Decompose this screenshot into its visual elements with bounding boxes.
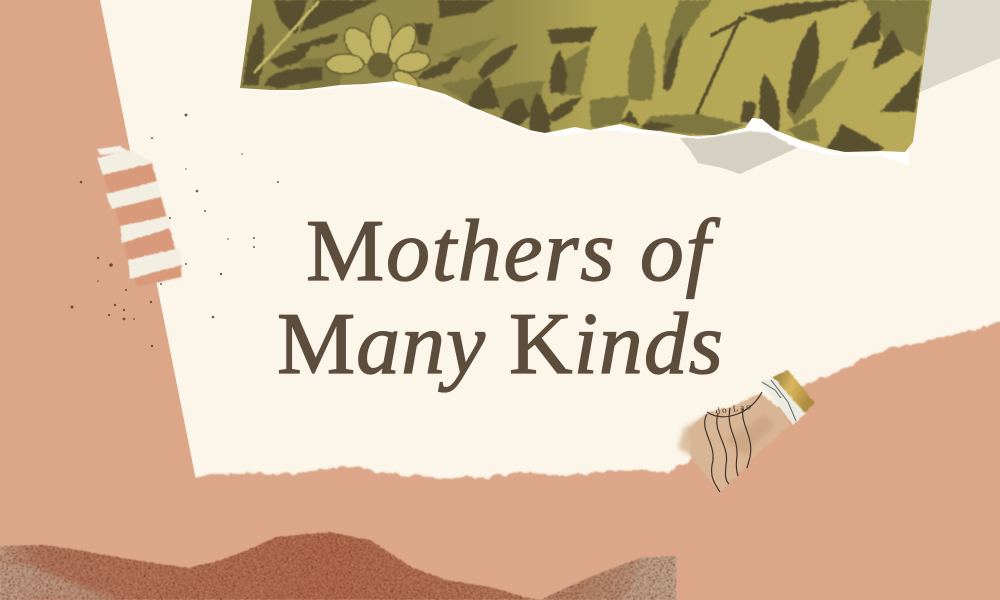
dark stem lines: [255, 2, 745, 113]
postmark lines: [705, 392, 762, 492]
copper dark grain: [0, 525, 680, 600]
foliage print panel: [235, 0, 935, 160]
title line 2: Many Kinds: [277, 296, 723, 393]
marble veins: [762, 380, 796, 421]
salmon paper: straight left wedge: [0, 0, 196, 600]
speckles on salmon paper: [70, 181, 153, 347]
flower: [326, 14, 431, 93]
copper grey lower left: [0, 565, 120, 600]
grey paper scrap under foliage: [680, 125, 797, 174]
stamp scrap: [678, 370, 815, 492]
dark leaves and stems: [243, 0, 923, 153]
gold strip: [773, 370, 815, 413]
stamp soft left lump: [678, 416, 712, 458]
white torn paper edge under foliage: [240, 82, 909, 165]
striped washi tape: [97, 146, 182, 287]
marble strip: [760, 377, 807, 425]
stamp tan body: [688, 393, 790, 492]
copper grey right end: [624, 558, 661, 600]
title: [277, 203, 723, 393]
grey paper behind foliage, top right: [918, 0, 1000, 93]
title line 1: Mothers of: [306, 203, 721, 300]
mid olive leaves: [300, 0, 930, 142]
stamp mottling: [725, 415, 775, 455]
copper torn foil: [0, 525, 680, 600]
postmark text: do Lao: [715, 401, 753, 416]
salmon paper: torn bottom area: [150, 320, 1000, 600]
copper light grain: [0, 533, 676, 600]
speckles on cream paper: [151, 114, 279, 318]
